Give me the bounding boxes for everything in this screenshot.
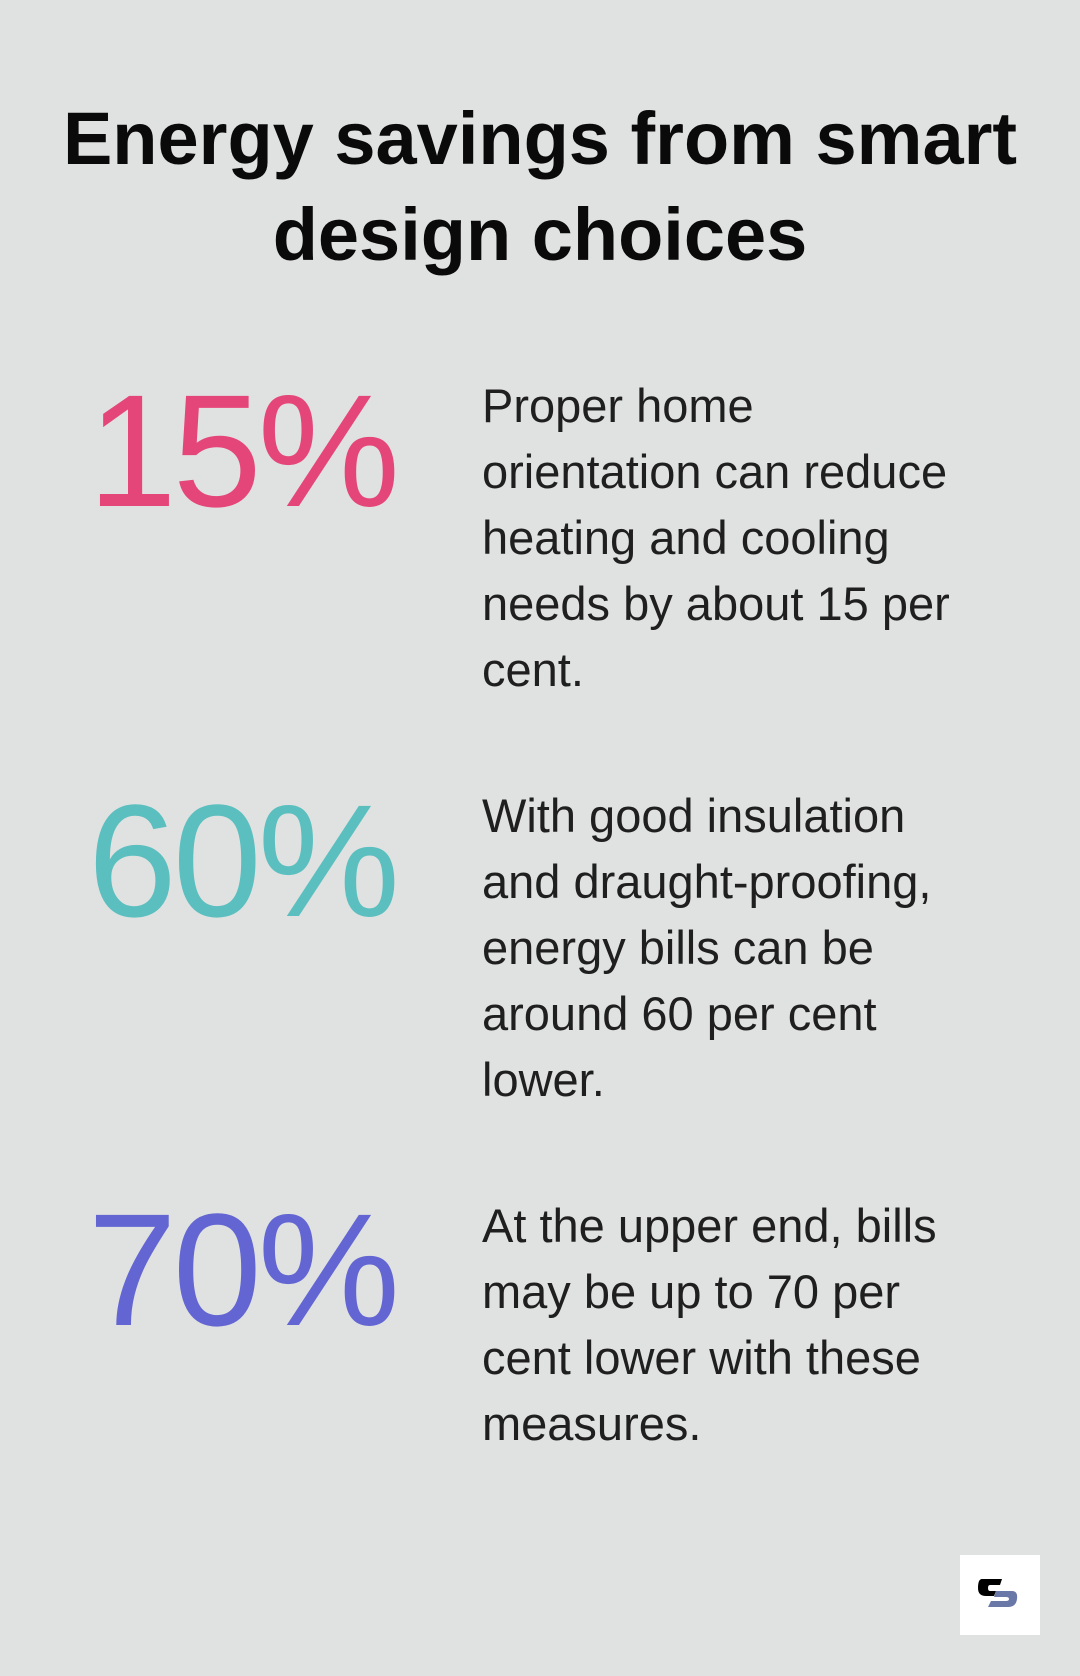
text: 60% description: around 60 per cent (482, 987, 877, 1040)
text: 70% description: may be up to 70 per (482, 1265, 900, 1318)
text: 15% description: cent. (482, 643, 584, 696)
stat: 15%: 15% (88, 361, 396, 540)
text: 15% description: heating and cooling (482, 511, 890, 564)
text: 70% description: measures. (482, 1397, 701, 1450)
text: 60% description: lower. (482, 1053, 605, 1106)
text: 60% description: energy bills can be (482, 921, 874, 974)
text: 15% description: Proper home (482, 379, 754, 432)
logo (960, 1555, 1040, 1635)
text: 70% description (482, 1199, 937, 1450)
text: 60% description: With good insulation (482, 789, 905, 842)
text: 15% description (482, 379, 950, 696)
text: 60% description (482, 789, 931, 1106)
text: 70% description: cent lower with these (482, 1331, 921, 1384)
text: 60% description: and draught-proofing, (482, 855, 931, 908)
title: design choices (273, 193, 807, 276)
text: 15% description: orientation can reduce (482, 445, 947, 498)
title: Energy savings from smart (63, 97, 1017, 180)
stat: 70%: 70% (88, 1180, 396, 1359)
title (63, 97, 1017, 276)
stat: 60%: 60% (88, 771, 396, 950)
text: 15% description: needs by about 15 per (482, 577, 950, 630)
text: 70% description: At the upper end, bills (482, 1199, 937, 1252)
